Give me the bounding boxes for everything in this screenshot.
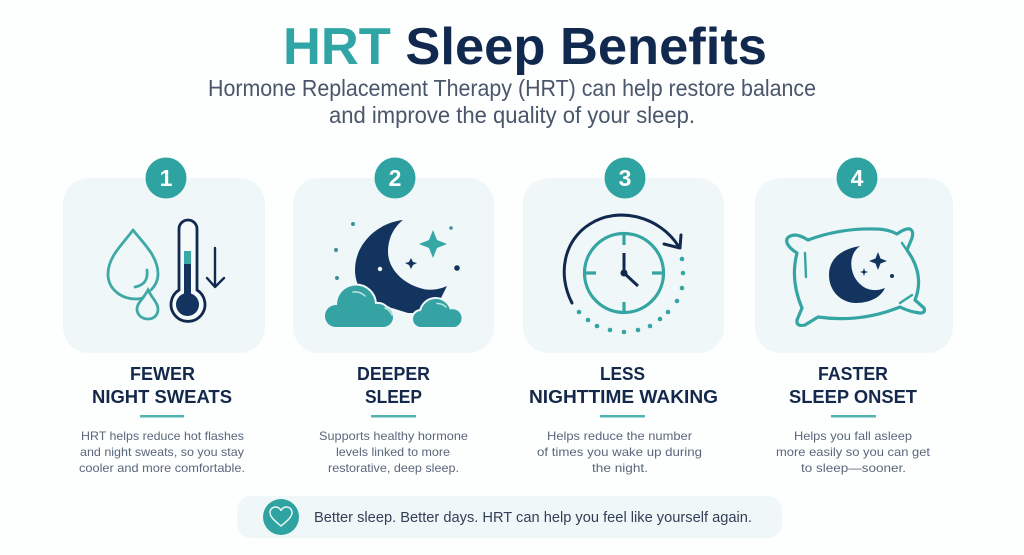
description 3: the night.	[592, 461, 648, 475]
title: HRT Sleep Benefits	[283, 18, 767, 76]
panel: faster sleep onset	[755, 158, 953, 475]
divider 4	[831, 415, 876, 418]
heading 2	[357, 364, 430, 407]
heading 4	[789, 364, 917, 407]
icon: right cloud	[413, 299, 462, 327]
card 1 background	[63, 178, 265, 353]
icon: heart	[263, 499, 299, 535]
number badge 4	[836, 158, 878, 198]
description 3	[537, 429, 702, 475]
description 3: of times you wake up during	[537, 445, 702, 459]
number badge 4: 4	[851, 165, 864, 191]
description 1: HRT helps reduce hot flashes	[81, 429, 244, 443]
card 2 background	[293, 178, 494, 353]
divider 1	[140, 415, 184, 418]
icon: clock	[584, 234, 664, 312]
heading 3: NIGHTTIME WAKING	[529, 387, 718, 407]
heading 2: DEEPER	[357, 364, 430, 384]
description 4: more easily so you can get	[776, 445, 931, 459]
description 2: restorative, deep sleep.	[328, 461, 459, 475]
description 2: Supports healthy hormone	[319, 429, 468, 443]
description 1: and night sweats, so you stay	[80, 445, 244, 459]
number badge 3: 3	[619, 165, 631, 191]
subtitle: Hormone Replacement Therapy (HRT) can help restore balance	[208, 75, 816, 101]
description 4: Helps you fall asleep	[794, 429, 912, 443]
heading 1: NIGHT SWEATS	[92, 387, 232, 407]
number badge 2	[374, 158, 416, 198]
subtitle	[208, 75, 816, 128]
heading 3: LESS	[600, 364, 645, 384]
icon: down arrow	[207, 248, 224, 287]
number badge 1: 1	[160, 165, 173, 191]
divider 3	[600, 415, 645, 418]
description 1: cooler and more comfortable.	[79, 461, 245, 475]
heading 2: SLEEP	[365, 387, 422, 407]
heading 3	[529, 364, 718, 407]
panel: less nighttime waking	[523, 158, 724, 475]
callout: footer banner	[237, 496, 782, 538]
icon: stars and dots	[334, 222, 460, 280]
panel: fewer night sweats	[63, 158, 265, 475]
description 4: to sleep—sooner.	[801, 461, 906, 475]
icon: crescent moon	[355, 220, 447, 313]
description 3: Helps reduce the number	[547, 429, 692, 443]
banner text: Better sleep. Better days. HRT can help you feel like yourself again.	[314, 510, 752, 526]
heading 1: FEWER	[130, 364, 195, 384]
heading 4: SLEEP ONSET	[789, 387, 917, 407]
description 2	[319, 429, 468, 475]
heading 4: FASTER	[818, 364, 888, 384]
heading 1	[92, 364, 232, 407]
banner background	[237, 496, 782, 538]
icon: dotted arc	[577, 257, 685, 334]
icon: thermometer	[171, 220, 205, 321]
description 1	[79, 429, 245, 475]
subtitle: and improve the quality of your sleep.	[329, 102, 695, 128]
icon: pillow	[787, 229, 924, 325]
number badge 2: 2	[389, 165, 401, 191]
description 2: levels linked to more	[336, 445, 450, 459]
icon: circular arrow	[564, 215, 681, 303]
card 3 background	[523, 178, 724, 353]
icon: water drops	[108, 230, 158, 319]
number badge 3	[604, 158, 646, 198]
description 4	[776, 429, 931, 475]
icon: pillow moon and stars	[829, 246, 894, 303]
number badge 1	[146, 158, 186, 198]
card 4 background	[755, 178, 953, 353]
icon: left cloud	[325, 286, 393, 327]
panel: deeper sleep	[293, 158, 494, 475]
divider 2	[371, 415, 416, 418]
